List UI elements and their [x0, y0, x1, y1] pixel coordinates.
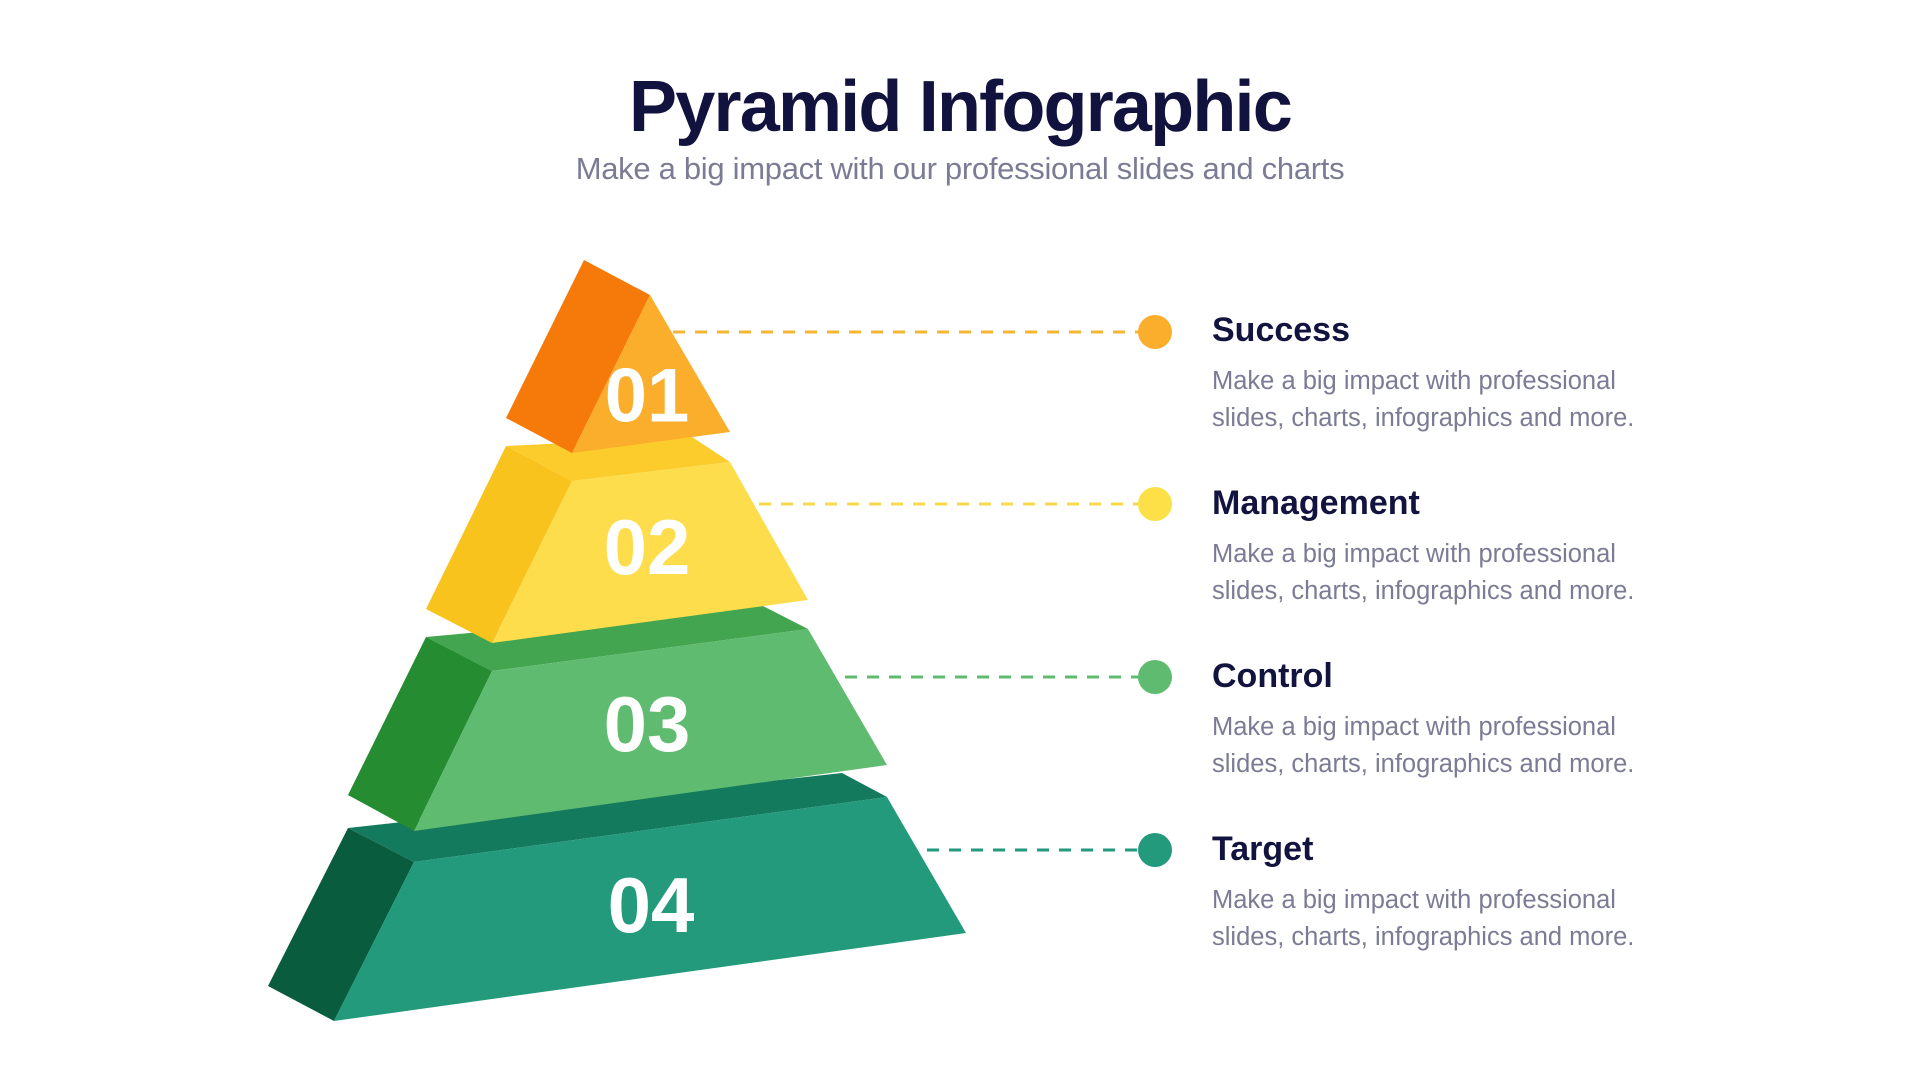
tier 1: 01	[605, 354, 689, 438]
item: Control: Control	[1212, 657, 1333, 695]
item: Control: Make a big impact with professional	[1212, 713, 1616, 741]
item: Success: slides, charts, infographics and more.	[1212, 404, 1634, 432]
item: Success: Make a big impact with professional	[1212, 367, 1616, 395]
item: Management: slides, charts, infographics and more.	[1212, 577, 1634, 605]
item: Management: Make a big impact with professional	[1212, 540, 1616, 568]
item: Management	[1212, 484, 1634, 605]
item: Success: Success	[1212, 311, 1350, 349]
item: Management: Management	[1212, 484, 1420, 522]
tier 4	[268, 773, 966, 1021]
item: Target: slides, charts, infographics and more.	[1212, 923, 1634, 951]
dots	[1138, 315, 1172, 867]
item: Control: slides, charts, infographics and more.	[1212, 750, 1634, 778]
item: Target	[1212, 830, 1634, 951]
item: Target: Target	[1212, 830, 1313, 868]
tier 2: 02	[604, 503, 690, 591]
item: Control	[1212, 657, 1634, 778]
subtitle: Make a big impact with our professional slides and charts	[576, 151, 1344, 186]
tier 4: 04	[608, 861, 694, 949]
tier 1	[506, 260, 730, 453]
item: Target: Make a big impact with professional	[1212, 886, 1616, 914]
tier 3	[348, 606, 887, 831]
item: Success	[1212, 311, 1634, 432]
connector lines	[673, 332, 1140, 850]
tier 3: 03	[604, 680, 690, 768]
title: Pyramid Infographic	[629, 67, 1291, 147]
tier 2	[426, 437, 808, 643]
